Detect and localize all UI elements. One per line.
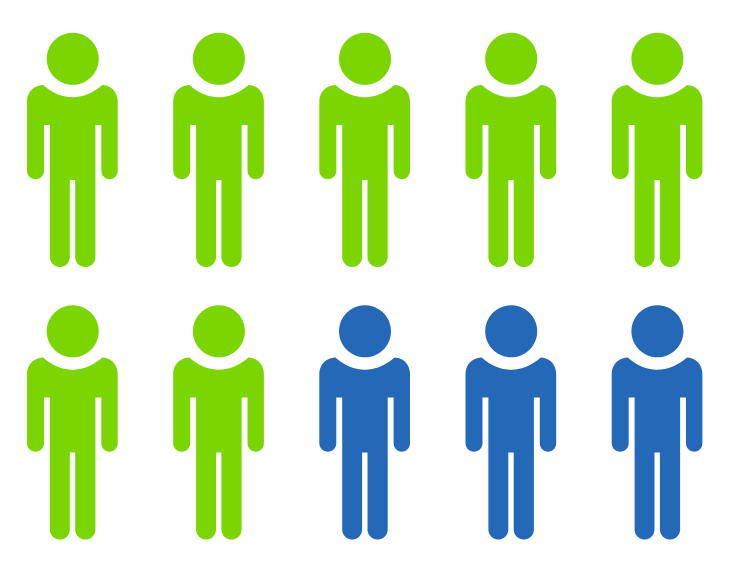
person 7: green	[173, 305, 264, 540]
person 9: blue	[466, 305, 556, 540]
person 5: green	[612, 33, 702, 267]
person 2: green	[173, 33, 264, 267]
person 6: green	[27, 305, 118, 540]
person 4: green	[466, 33, 556, 267]
person 8: blue	[319, 305, 410, 540]
person 10: blue	[612, 305, 702, 540]
person 3: green	[319, 33, 410, 267]
person 1: green	[27, 33, 118, 267]
